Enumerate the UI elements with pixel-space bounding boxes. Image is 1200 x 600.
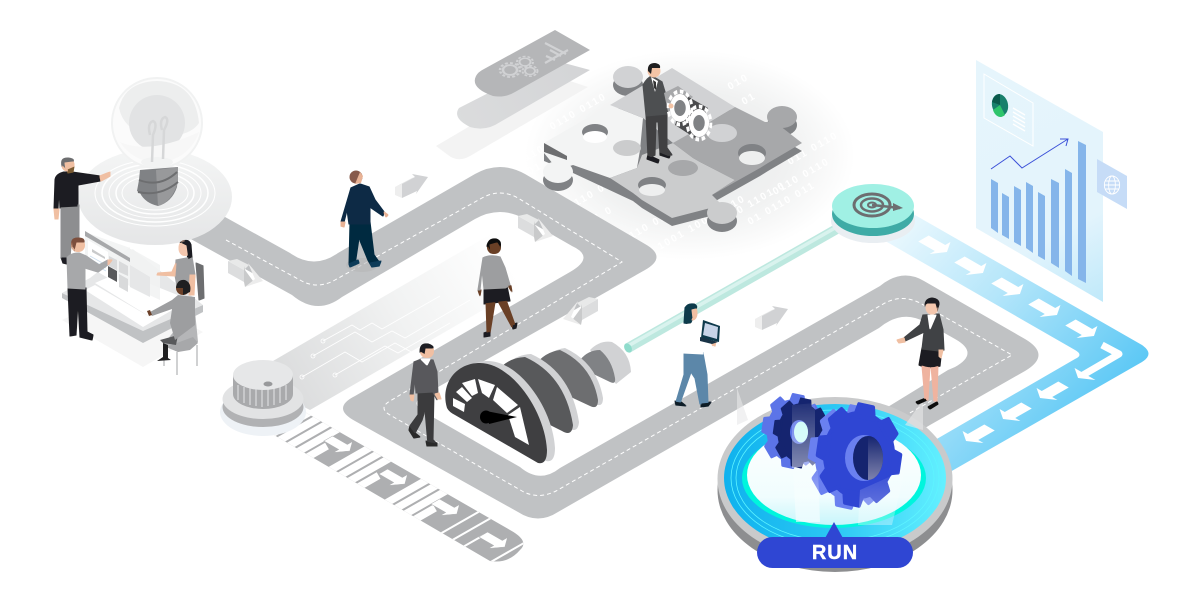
panel strip: middle layer [457, 60, 590, 129]
target icon [854, 194, 903, 216]
binary data halo: 0110 1101 0 [716, 180, 788, 228]
puzzle thickness [543, 74, 802, 232]
disc 3 rim [540, 348, 603, 405]
circuit strip [273, 223, 552, 410]
strip arrow 1 [319, 433, 360, 456]
block arrow: road 2 [395, 174, 428, 198]
disc 2 rim [501, 354, 579, 430]
strip arrow 2 [374, 466, 415, 490]
table with screens [62, 231, 203, 367]
binary data halo: 01 [526, 161, 545, 178]
globe tag [1097, 159, 1127, 209]
person: woman in blazer [897, 298, 944, 409]
speedometer stack [445, 342, 631, 463]
trend line arrow [991, 139, 1068, 169]
light bulb platform [78, 149, 232, 245]
bottom piece knobs [613, 140, 737, 224]
gauge rim [453, 361, 555, 461]
RUN gear platform [718, 388, 952, 572]
light beams [737, 388, 923, 430]
bulb filaments [149, 117, 167, 162]
piece: top [610, 68, 735, 143]
binary data halo: 1001 1001 0110 [656, 193, 748, 253]
striped road with arrows [262, 411, 531, 563]
teal tube [622, 224, 842, 354]
strip arrow 3 [426, 496, 467, 520]
disc 4 rim [590, 342, 631, 384]
binary data halo: 01 0 [586, 204, 615, 228]
gauge face [445, 363, 547, 463]
gear and chart icon strip [475, 30, 590, 96]
person: woman in black skirt [478, 239, 517, 337]
piece: left [544, 105, 643, 178]
binary data halo: 01 [740, 91, 759, 108]
binary data halo: 010 [726, 72, 751, 93]
person: businessman with gears [643, 63, 711, 163]
jigsaw puzzle [543, 66, 802, 232]
bulb screw base [137, 167, 178, 206]
return arrows [956, 378, 1074, 447]
binary data halo: 0110 0110 [771, 156, 832, 198]
top piece tab [707, 124, 737, 142]
small gear [762, 394, 829, 468]
panel strip: faint base layer [436, 76, 588, 159]
gears held by businessman [664, 86, 711, 140]
binary data halo: 01 0110 011 [746, 180, 818, 228]
person: seated woman [157, 240, 204, 300]
top piece knob [613, 66, 643, 88]
binary data halo: 011 0110 [786, 130, 841, 168]
gear knob on disc [220, 360, 306, 436]
road: grey winding path [160, 167, 1038, 518]
piece: bottom [610, 143, 735, 218]
strip arrow 4 [474, 529, 515, 552]
block arrow: road 4 [563, 297, 598, 325]
right piece knobs [668, 106, 797, 176]
person: man in black sweater [54, 158, 110, 264]
puzzle holes [544, 124, 766, 196]
disc 3 [535, 350, 598, 407]
target disc [831, 184, 915, 243]
road centre dashes [226, 193, 1012, 496]
bars [991, 141, 1086, 283]
block arrow: road 5 [755, 306, 788, 330]
panel: analytics chart [976, 60, 1127, 302]
binary data halo [516, 50, 855, 260]
binary data halo: 0110 0110 [548, 91, 609, 133]
binary data halo: 0110 [516, 143, 547, 168]
RUN label [757, 522, 913, 568]
left piece knob [543, 161, 573, 183]
laptop [700, 320, 720, 344]
translucent screens [85, 231, 160, 300]
gauge ticks [453, 379, 529, 445]
forward arrows [913, 232, 1104, 342]
person: man in navy suit [341, 170, 388, 272]
pie card [984, 74, 1033, 146]
u-turn arrow [1068, 345, 1119, 384]
platform base [718, 408, 952, 572]
person: man in grey top at screen [67, 238, 112, 340]
gauge needle [480, 410, 517, 424]
binary data halo: 0110 01 [621, 211, 669, 246]
person: seated man [147, 280, 198, 375]
cyan ring [724, 404, 946, 552]
block arrow: road 1 [228, 259, 263, 287]
large gear [793, 404, 905, 525]
blue road with arrows [880, 215, 1148, 472]
RUN label: RUN [812, 542, 858, 564]
person: man with glasses [409, 344, 441, 446]
light bulb [112, 78, 202, 206]
binary data halo: 0110 0110 [566, 171, 627, 213]
binary data halo: 0110 [546, 168, 577, 193]
disc 2 [495, 357, 573, 433]
block arrow: road 3 [518, 214, 553, 242]
piece: right [673, 107, 802, 195]
disc 4 [580, 350, 615, 383]
person: woman with laptop [675, 304, 720, 407]
